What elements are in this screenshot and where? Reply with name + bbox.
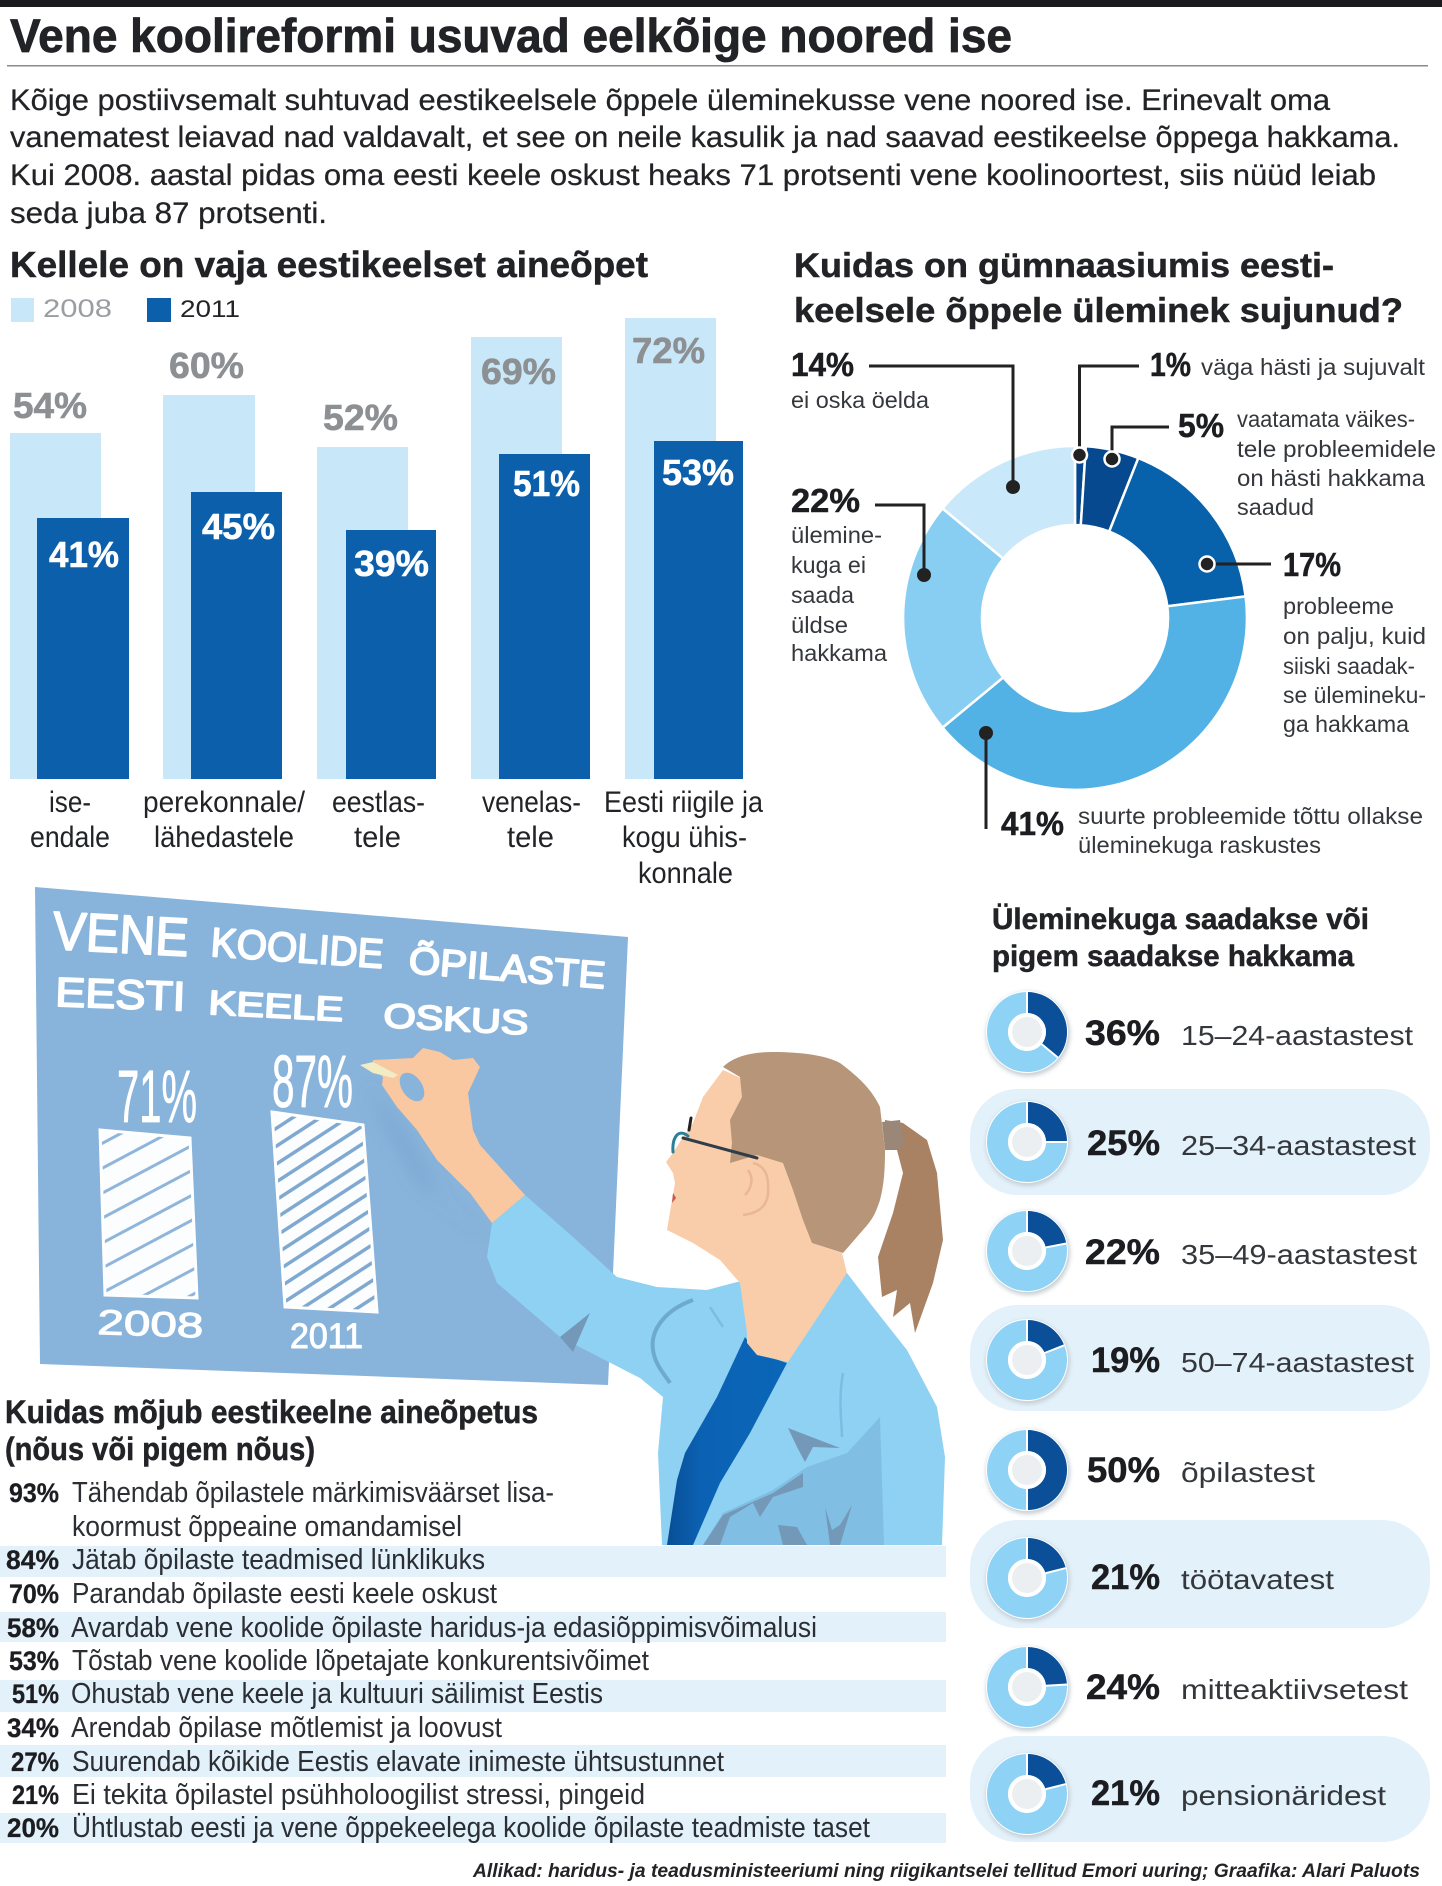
row 53%: Tõstab vene koolide lõpetajate konkurentsivõimet [72,1645,649,1677]
category labels: Eesti riigile ja [604,786,763,819]
callout 22%: hakkama [791,640,887,666]
category labels: lähedastele [154,821,294,854]
row students: õpilastest [1181,1457,1315,1488]
alternating row bands [970,1089,1430,1842]
age group heading [992,903,1369,973]
row 53%: 53% [9,1646,59,1676]
row 27%: 27% [11,1747,59,1777]
row 21%: Ei tekita õpilastel psühholoogilist stressi, pingeid [72,1779,645,1811]
list heading: (nõus või pigem nõus) [5,1431,315,1467]
row employed: töötavatest [1181,1564,1334,1595]
row 50–74 [986,1319,1414,1404]
callout 41%: suurte probleemide tõttu ollakse [1078,803,1423,829]
row pensioners: 21% [1091,1774,1160,1813]
row 70%: 70% [9,1579,59,1609]
callout 5%: saadud [1237,494,1314,520]
intro text: Kõige postiivsemalt suhtuvad eestikeelsele õppele üleminekusse vene noored ise. Erinevalt oma [10,84,1330,117]
callout 41%: üleminekuga raskustes [1078,832,1321,858]
row 35–49 [986,1210,1417,1295]
callout 5%: tele probleemidele [1237,436,1436,462]
legend [11,295,240,323]
hair [723,1052,885,1253]
category labels: tele [354,821,401,854]
value labels 2011 [49,452,734,584]
arm shadow on board [365,1085,495,1250]
value labels 2008 [13,330,705,438]
row 50–74: 50–74-aastastest [1181,1347,1414,1378]
row 51%: Ohustab vene keele ja kultuuri säilimist Eestis [71,1678,603,1710]
callout 22%: kuga ei [791,552,866,578]
value labels 2011: 39% [354,543,429,584]
row 35–49: 22% [1085,1233,1160,1272]
callout 17%: siiski saadak- [1283,653,1415,679]
blackboard [35,887,628,1385]
category labels: eestlas- [332,786,425,819]
callout 41% [979,726,1423,858]
row 15–24: 36% [1085,1014,1160,1053]
row 50–74: 19% [1091,1341,1160,1380]
row employed [986,1537,1334,1622]
title: Vene koolireformi usuvad eelkõige noored ise [10,9,1012,62]
row 93% [9,1477,554,1543]
panel: donut chart how the transition went [791,247,1436,858]
row pensioners: pensionäridest [1181,1780,1386,1811]
chalk heading: KEELE [208,984,344,1029]
panel: effects of Estonian-language teaching list [0,1394,946,1844]
chalk bar 2011: 2011 [290,1317,363,1356]
intro text: Kui 2008. aastal pidas oma eesti keele oskust heaks 71 protsenti vene koolinoortest, siis nüüd leiab [10,159,1376,192]
row 25–34 [986,1101,1416,1186]
donut heading: keelsele õppele üleminek sujunud? [794,292,1403,330]
donut heading: Kuidas on gümnaasiumis eesti- [794,247,1334,285]
row 84%: 84% [6,1545,59,1575]
callout 1%: väga hästi ja sujuvalt [1201,354,1426,380]
row 93%: 93% [9,1478,59,1508]
row pensioners [986,1753,1386,1838]
row 15–24: 15–24-aastastest [1181,1020,1413,1051]
row 15–24 [986,991,1413,1076]
callout 14% [791,346,1020,494]
coat [487,1195,945,1545]
ponytail [878,1120,943,1333]
row 21%: 21% [12,1780,59,1810]
callout 22% [791,482,931,666]
chalk heading: ÕPILASTE [407,938,607,997]
callout 5%: vaatamata väikes- [1237,406,1415,432]
callout 5% [1104,406,1436,520]
callout 22%: ülemine- [791,522,882,548]
callout 5%: 5% [1178,407,1224,444]
bars 2011 [37,441,743,779]
value labels 2008: 60% [169,345,244,386]
source note: Allikad: haridus- ja teadusministeeriumi ning riigikantselei tellitud Emori uuring; Graafika: Alari Paluots [472,1861,1420,1882]
row 34%: 34% [7,1713,59,1743]
bar chart heading: Kellele on vaja eestikeelset aineõpet [10,244,648,285]
value labels 2008: 54% [13,385,87,426]
shirt [667,1337,787,1545]
value labels 2011: 45% [202,506,275,547]
glasses [673,1118,757,1158]
callout 14%: ei oska öelda [791,387,929,413]
callout 1%: 1% [1150,346,1191,383]
panel: blackboard with chalk chart [35,887,628,1385]
chalk heading: OSKUS [383,997,529,1043]
row 25–34: 25–34-aastastest [1181,1130,1416,1161]
callout 17%: ga hakkama [1283,711,1409,737]
category labels: kogu ühis- [622,821,747,854]
donut heading [794,247,1403,330]
ear [743,1163,768,1215]
value labels 2011: 51% [513,463,580,504]
callout 17% [1200,546,1426,737]
arm and hand [373,1048,525,1223]
panel: bar chart who needs Estonian-language teaching [10,244,763,890]
row inactive: 24% [1086,1668,1160,1707]
category labels: venelas- [482,786,581,819]
intro text: vanematest leiavad nad valdavalt, et see on neile kasulik ja nad saavad eestikeelse õppega hakkama. [10,121,1400,154]
row 20%: Ühtlustab eesti ja vene õppekeelega koolide õpilaste teadmiste taset [72,1812,870,1844]
chalk heading: VENE [51,901,190,968]
value labels 2008: 69% [481,351,556,392]
value labels 2008: 72% [632,330,705,371]
age group heading: pigem saadakse hakkama [992,940,1354,973]
bars 2008 [10,318,716,779]
neck and face [666,1070,847,1362]
intro text: seda juba 87 protsenti. [10,197,327,230]
coat shaded lower part [703,1417,884,1545]
age group heading: Üleminekuga saadakse või [992,903,1369,936]
illustration: teacher writing on the board [360,1048,945,1545]
category labels: endale [30,821,110,854]
callout 17%: on palju, kuid [1283,623,1426,649]
row students: 50% [1087,1451,1160,1490]
category labels: ise- [49,786,91,819]
row 35–49: 35–49-aastastest [1181,1239,1417,1270]
callout 22%: üldse [791,612,848,638]
category labels [30,786,763,890]
chalk bar 2008: 71% [117,1055,197,1138]
row 58%: Avardab vene koolide õpilaste haridus-ja edasiõppimisvõimalusi [71,1612,817,1644]
row 84%: Jätab õpilaste teadmised lünklikuks [72,1544,485,1576]
intro text [10,84,1400,230]
category labels: perekonnale/ [143,786,306,819]
row 58%: 58% [7,1613,59,1643]
callout 22%: saada [791,582,854,608]
callout 14%: 14% [791,346,854,383]
callout 5%: on hästi hakkama [1237,465,1425,491]
chalk bar 2008 [97,1055,204,1346]
chalk bar 2011 [272,1040,377,1356]
row 20%: 20% [7,1813,59,1843]
callout 17%: 17% [1283,546,1341,583]
row 34%: Arendab õpilase mõtlemist ja loovust [71,1712,502,1744]
coat folds [560,1313,852,1545]
chalk stick [360,1062,398,1078]
list row bands [0,1546,946,1843]
callout 1% [1072,346,1426,462]
donut chart [903,446,1247,790]
row 51%: 51% [12,1679,59,1709]
callout 17%: probleeme [1283,593,1394,619]
chalk heading: EESTI [55,969,186,1020]
panel: age group donuts [970,903,1430,1842]
callout 41%: 41% [1001,805,1064,842]
lips [672,1193,676,1203]
row employed: 21% [1091,1558,1160,1597]
chalk heading: KOOLIDE [209,919,385,977]
category labels: tele [507,821,554,854]
row inactive: mitteaktiivsetest [1181,1674,1408,1705]
category labels: konnale [638,857,733,890]
legend: 2008 [43,295,112,323]
row 27%: Suurendab kõikide Eestis elavate inimeste ühtsustunnet [72,1746,724,1778]
row 93%: koormust õppeaine omandamisel [72,1511,462,1543]
row inactive [986,1646,1408,1731]
row 93%: Tähendab õpilastele märkimisväärset lisa- [72,1477,554,1509]
row 25–34: 25% [1087,1124,1160,1163]
chalk bar 2008: 2008 [97,1303,204,1346]
chalk heading [51,901,607,1043]
row 70%: Parandab õpilaste eesti keele oskust [72,1578,497,1610]
legend: 2011 [180,296,240,323]
value labels 2008: 52% [323,397,398,438]
list heading: Kuidas mõjub eestikeelne aineõpetus [5,1394,538,1430]
value labels 2011: 41% [49,534,119,575]
callout 17%: se ülemineku- [1283,682,1426,708]
value labels 2011: 53% [662,452,734,493]
callout 22%: 22% [791,482,860,519]
row students [986,1429,1315,1514]
chalk bar 2011: 87% [272,1040,353,1123]
list heading [5,1394,538,1467]
